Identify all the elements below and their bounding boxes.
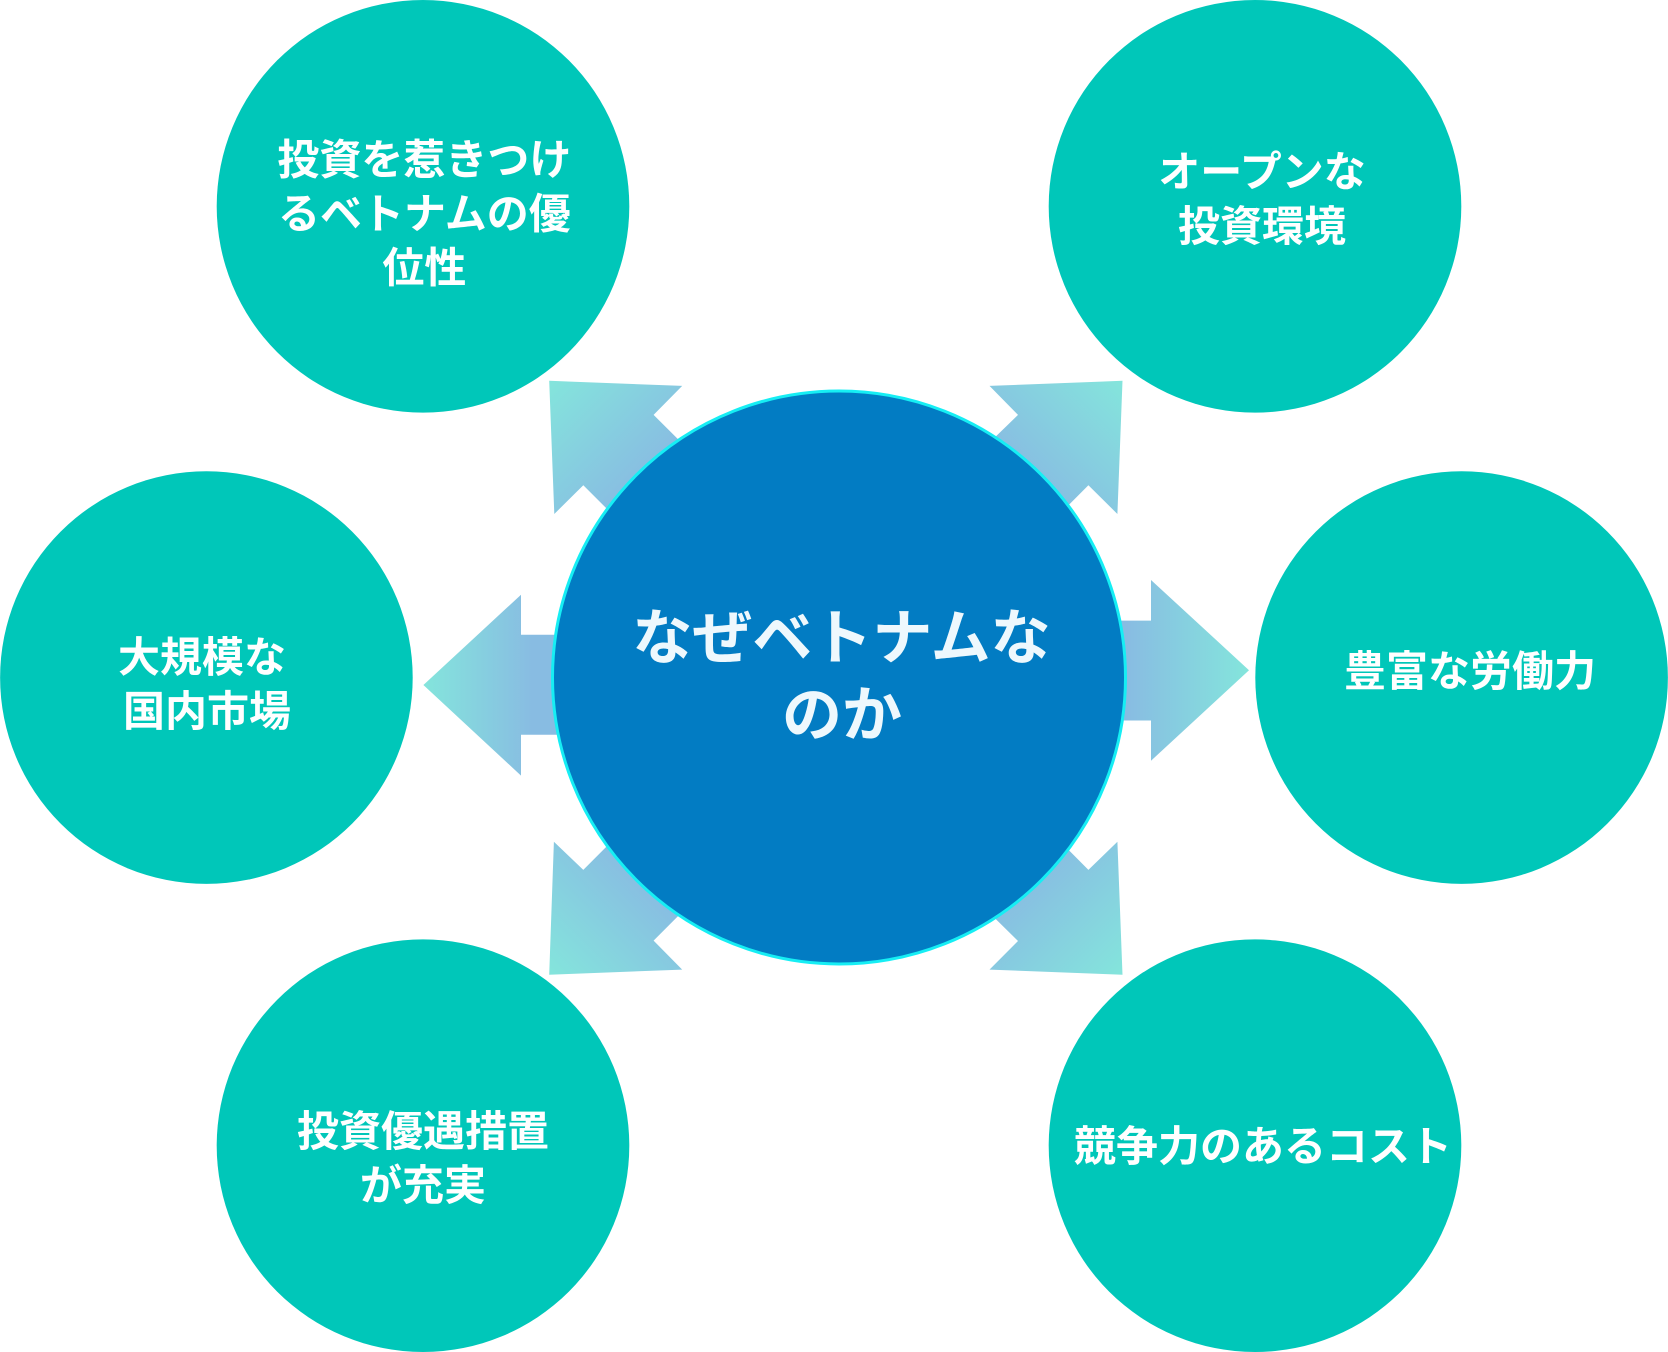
- arrow: to top-right circle: [950, 381, 1122, 552]
- circle: abundant labor force: [1255, 471, 1668, 884]
- circle: large domestic market: 国内市場: [123, 688, 291, 735]
- circle: open investment environment: 投資環境: [1178, 203, 1346, 250]
- circle: large domestic market: [0, 471, 413, 884]
- circle: top-left advantage: 位性: [382, 244, 466, 292]
- arrow: to bottom-left circle: [549, 803, 720, 975]
- center circle: なぜベトナムなのか: [552, 391, 1126, 964]
- circle: investment incentives: [217, 939, 629, 1352]
- arrow: to right circle: [1080, 580, 1249, 761]
- circle: top-left advantage: るベトナムの優: [278, 190, 571, 238]
- arrow: to top-left circle: [549, 381, 720, 552]
- circle: competitive cost: 競争力のあるコスト: [1074, 1123, 1452, 1170]
- center circle: なぜベトナムなのか: のか: [782, 682, 902, 749]
- arrow: to left circle: [423, 595, 600, 776]
- circle: investment incentives: が充実: [360, 1162, 486, 1209]
- circle: investment incentives: 投資優遇措置: [297, 1108, 549, 1155]
- circle: competitive cost: [1049, 939, 1461, 1352]
- center circle: なぜベトナムなのか: なぜベトナムな: [632, 605, 1051, 672]
- arrow: to bottom-right circle: [950, 803, 1122, 975]
- circle: top-left advantage: [217, 0, 629, 413]
- circle: open investment environment: オープンな: [1158, 148, 1366, 196]
- circle: open investment environment: [1049, 0, 1461, 413]
- circle: top-left advantage: 投資を惹きつけ: [277, 136, 571, 184]
- circle: large domestic market: 大規模な: [118, 634, 286, 681]
- circle: abundant labor force: 豊富な労働力: [1344, 648, 1596, 695]
